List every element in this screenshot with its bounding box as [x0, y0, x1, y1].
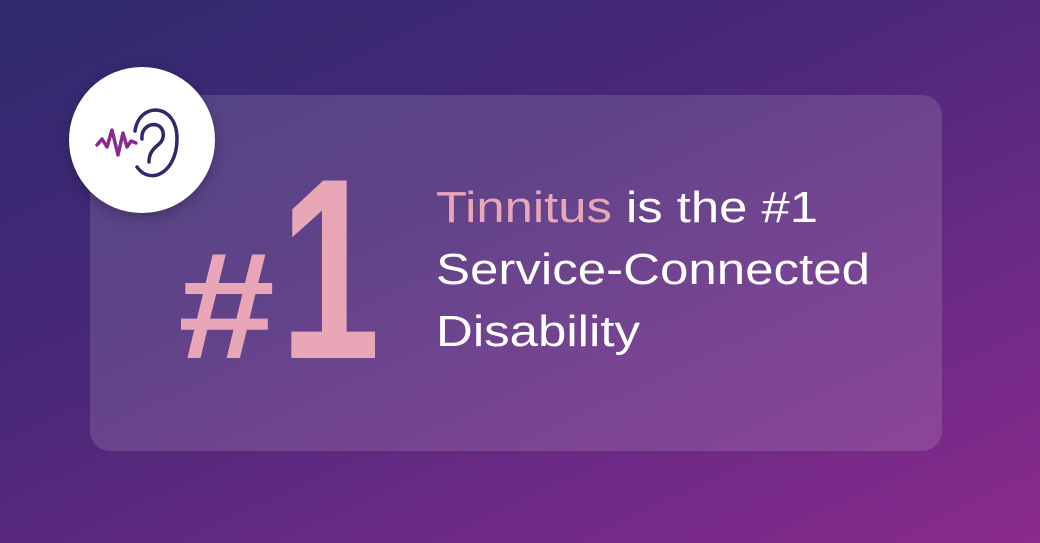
panel: main card [90, 95, 942, 451]
big number #1: # [178, 221, 275, 391]
statement text: Disability [436, 307, 640, 356]
big number #1 [178, 124, 380, 413]
statement text [436, 183, 870, 356]
statement text: Service-Connected [436, 245, 870, 294]
big number #1: 1 [280, 124, 380, 413]
icon: ear with sound wave [69, 67, 215, 213]
statement text: Tinnitus is the #1 [436, 183, 818, 232]
